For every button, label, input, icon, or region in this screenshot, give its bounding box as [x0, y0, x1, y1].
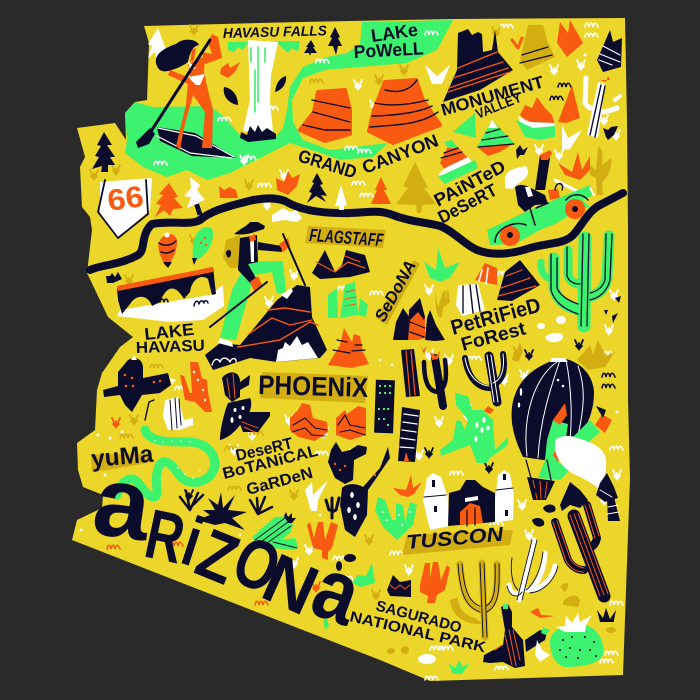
- Arizona title: a: [301, 537, 375, 645]
- small marks scattered across the map: [80, 23, 623, 680]
- waterfall: [228, 41, 300, 53]
- Monument Valley label: MONUMENT: [439, 72, 547, 120]
- hiker on mountain: [205, 208, 327, 370]
- orange cactus near Lake Havasu: [180, 362, 212, 412]
- Lake Havasu label: HAVASU: [136, 338, 205, 357]
- small green plants: [323, 563, 375, 630]
- Sedona label: SeDoNA: [371, 257, 420, 325]
- Tuscon label: TUSCON: [406, 524, 505, 554]
- Arizona title: a: [87, 444, 159, 563]
- body: [515, 185, 548, 212]
- white snow peak: [272, 208, 302, 222]
- Desert Botanical Garden label: DeseRT: [234, 435, 295, 465]
- Sagurado National Park label: NATIONAL PARK: [348, 608, 488, 656]
- jeep with driver: [487, 150, 594, 246]
- Petrified Forest label: [448, 294, 543, 356]
- river and lakes in green: [125, 20, 453, 180]
- water: [117, 285, 224, 322]
- Desert Botanical Garden label: GaRDeN: [245, 465, 315, 499]
- Arizona title: i: [173, 502, 212, 581]
- towers and strips: [374, 349, 420, 462]
- torso: [188, 56, 206, 84]
- legs: [176, 78, 213, 150]
- Route 66 sign: 66: [105, 180, 146, 218]
- plants around Arizona title: [180, 480, 339, 560]
- Lake Powell label: LAKe: [370, 20, 419, 46]
- Sedona green plant: [424, 248, 460, 282]
- Phoenix orange canyons: [290, 403, 366, 441]
- Lake Powell label: PoWeLL: [353, 38, 424, 62]
- orange plant: [558, 152, 592, 180]
- Havasu Falls label: HAVASU FALLS: [223, 22, 328, 41]
- white saguaro top right: [585, 76, 620, 138]
- green hand-shaped cactus: [375, 475, 422, 540]
- central navy pear cactus: [328, 442, 390, 537]
- white striped navy cactus: [465, 354, 504, 402]
- Arizona title: O: [222, 520, 292, 609]
- white outlined cactus: [507, 540, 558, 600]
- Grand Canyon label: GRAND: [296, 146, 359, 182]
- navy pear cactus north west: [103, 355, 176, 412]
- torso: [238, 235, 258, 285]
- Monument Valley rocks: [425, 20, 622, 102]
- wheels: [500, 226, 520, 246]
- balloon and club: [158, 227, 213, 268]
- Petrified Forest label: PetRiFieD: [448, 294, 543, 340]
- white blob: [555, 436, 606, 488]
- snake: [117, 400, 215, 497]
- white plant: [562, 125, 582, 150]
- Lake Havasu bridge: [106, 267, 224, 322]
- Painted Desert mounds: [438, 85, 618, 195]
- Petrified Forest rocks: [435, 260, 621, 370]
- green barrel cactus with flower: [387, 583, 616, 674]
- dark cactus south east: [553, 504, 608, 596]
- arm raised: [202, 34, 222, 64]
- barrel cactus balloon with people: [512, 358, 612, 500]
- Sagurado National Park label: SAGURADO: [374, 597, 464, 637]
- state of Arizona shape: [72, 18, 630, 681]
- Arizona title: R: [139, 494, 191, 578]
- road: [90, 193, 623, 270]
- climber: [538, 420, 570, 480]
- Lake Havasu label: [136, 320, 205, 357]
- hair: [505, 166, 528, 189]
- mission church: [423, 470, 514, 530]
- paddleboarder with waterfall: [136, 34, 300, 158]
- poles: [210, 234, 305, 327]
- arm: [535, 155, 550, 190]
- Petrified Forest label: FoRest: [459, 318, 529, 356]
- basket: [527, 477, 555, 500]
- hair: [156, 40, 199, 71]
- Arizona title: [87, 444, 375, 645]
- Grand Canyon label: [296, 130, 441, 182]
- green prickly pear: [440, 393, 508, 463]
- Painted Desert label: DeSeRT: [434, 180, 500, 228]
- pear cactus near Phoenix: [220, 372, 270, 440]
- Route 66 sign: [98, 178, 152, 238]
- small navy plant: [603, 126, 618, 140]
- white pebbles: [545, 333, 563, 342]
- hat: [234, 222, 265, 235]
- Painted Desert label: PAiNTeD: [430, 156, 509, 211]
- white plant: [425, 65, 450, 84]
- Desert Botanical Garden label: [221, 435, 320, 499]
- mustard saguaro: [450, 563, 499, 637]
- Lake Powell label: [353, 20, 424, 62]
- navy pear cactus south: [483, 604, 550, 668]
- navy saguaro: [420, 345, 446, 406]
- Phoenix label: PHOENiX: [258, 370, 369, 403]
- trees and plants northwest: [92, 27, 436, 217]
- paddle: [148, 40, 210, 136]
- Flagstaff label: [305, 225, 386, 250]
- Monument Valley label: VALLEY: [473, 89, 524, 122]
- mountain: [205, 285, 327, 370]
- orange cactus tuscon: [420, 562, 450, 603]
- navy pebbles: [604, 296, 621, 323]
- Sagurado National Park label: [348, 597, 488, 656]
- legs: [220, 261, 286, 340]
- Arizona title: Z: [186, 514, 249, 599]
- Flagstaff mountains and Sedona rocks: [312, 250, 445, 368]
- Grand Canyon rocks: [300, 80, 440, 143]
- Yuma label: yuMa: [90, 441, 155, 473]
- Flagstaff label: FLAGSTAFF: [309, 225, 385, 250]
- Lake Havasu label: LAKE: [143, 320, 195, 344]
- navy pebbles and small rocks: [387, 473, 620, 597]
- board: [157, 127, 236, 158]
- car body: [487, 185, 592, 245]
- Arizona title: N: [252, 538, 329, 630]
- Grand Canyon label: CANYON: [359, 130, 441, 178]
- backpack: [223, 235, 243, 268]
- Desert Botanical Garden label: BoTANiCAL: [221, 443, 320, 483]
- deck and arches: [117, 267, 216, 314]
- white striped mitten: [163, 397, 193, 430]
- water drops: [224, 87, 238, 105]
- green saguaro: [541, 234, 612, 326]
